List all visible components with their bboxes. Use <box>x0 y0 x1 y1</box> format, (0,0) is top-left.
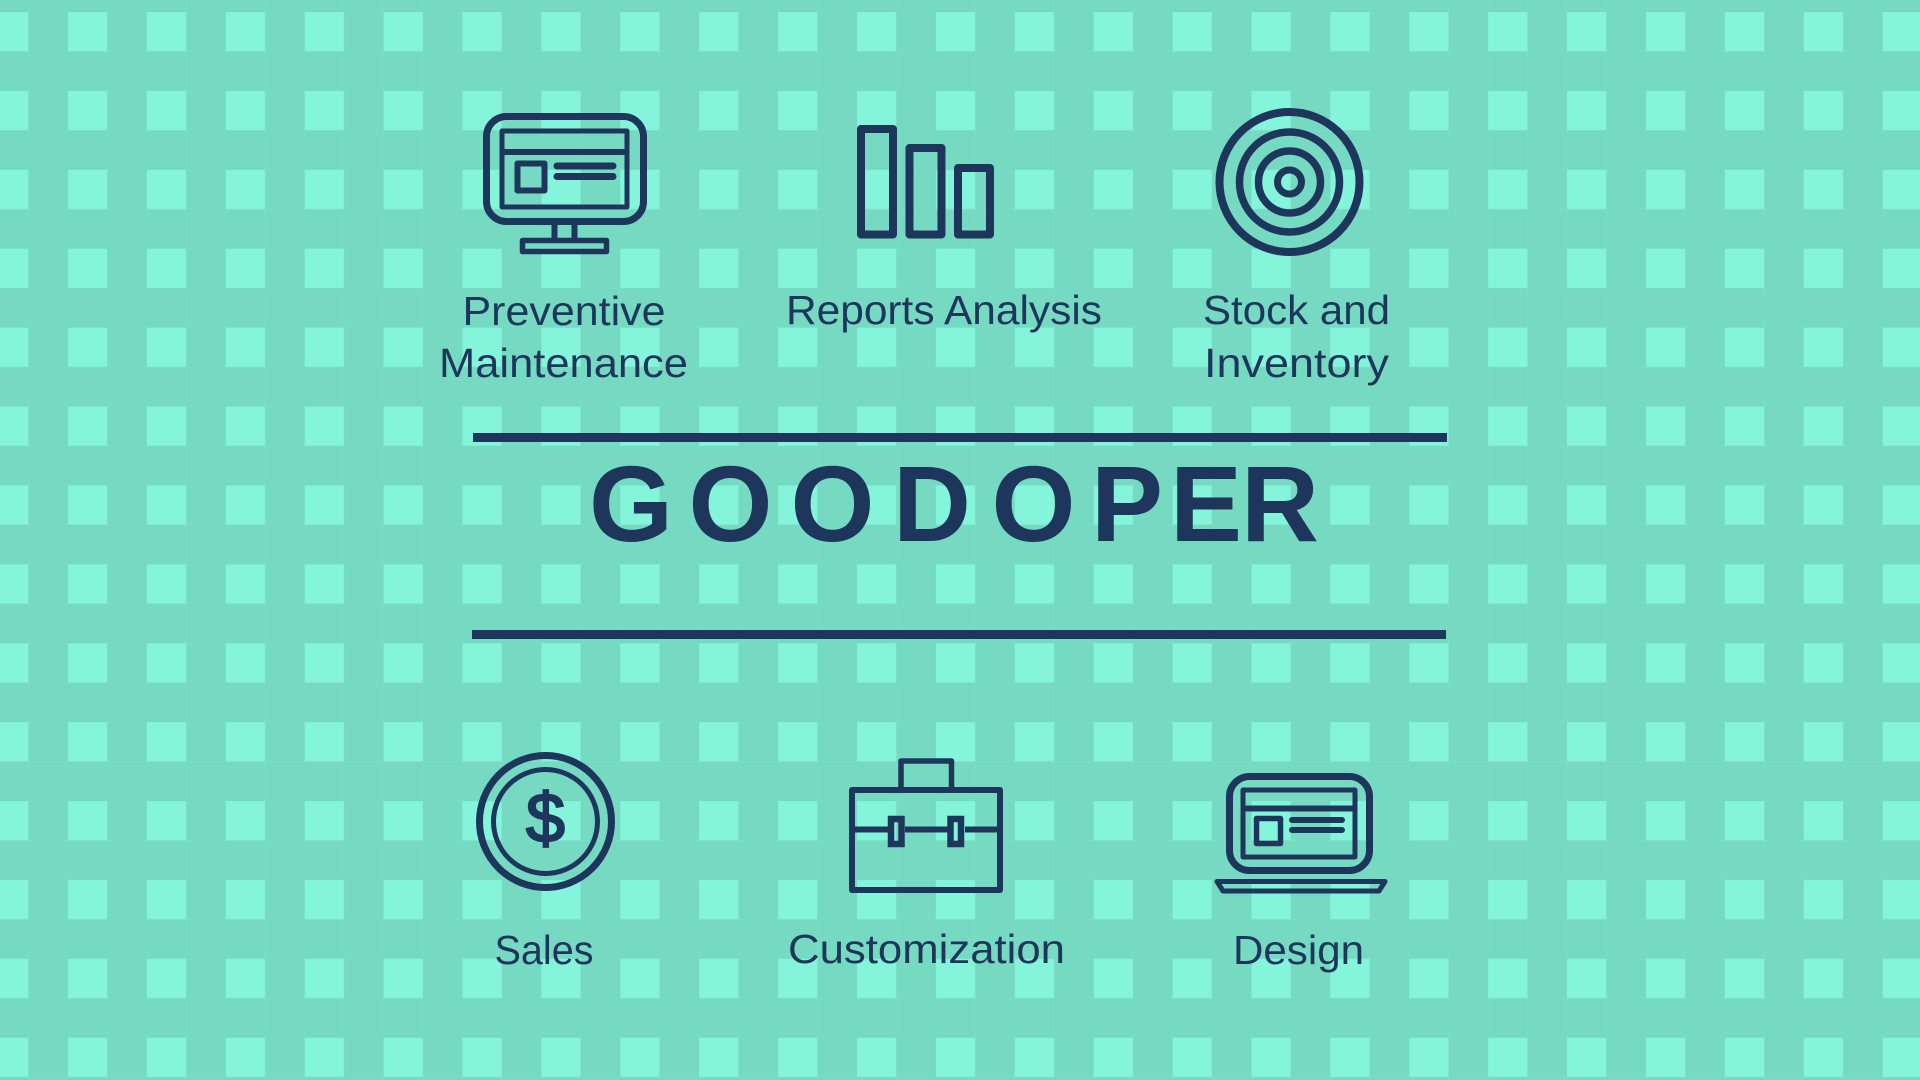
label: Stock and Inventory: Stock and <box>1203 287 1390 333</box>
label: Customization: Customization <box>788 926 1065 972</box>
icon: dollar coin <box>480 756 612 888</box>
label: Preventive Maintenance <box>439 288 688 386</box>
label: Stock and Inventory: Inventory <box>1204 340 1390 386</box>
title: GOODOPER <box>589 443 1319 564</box>
bottom divider <box>472 630 1446 639</box>
label: Preventive Maintenance: Preventive <box>462 288 666 334</box>
icon: computer monitor <box>486 116 644 252</box>
icon: bar chart <box>861 129 990 234</box>
label: Sales: Sales <box>494 927 594 973</box>
label: Preventive Maintenance: Maintenance <box>439 340 688 386</box>
label: Stock and Inventory <box>1203 287 1390 386</box>
label: Reports Analysis: Reports Analysis <box>786 287 1102 333</box>
top divider <box>473 433 1447 442</box>
icon: briefcase <box>852 761 1000 890</box>
label: Design: Design <box>1233 927 1364 973</box>
icon: dollar coin: $ <box>526 779 565 857</box>
icon: target rings <box>1220 112 1360 252</box>
icon: laptop <box>1217 776 1385 891</box>
